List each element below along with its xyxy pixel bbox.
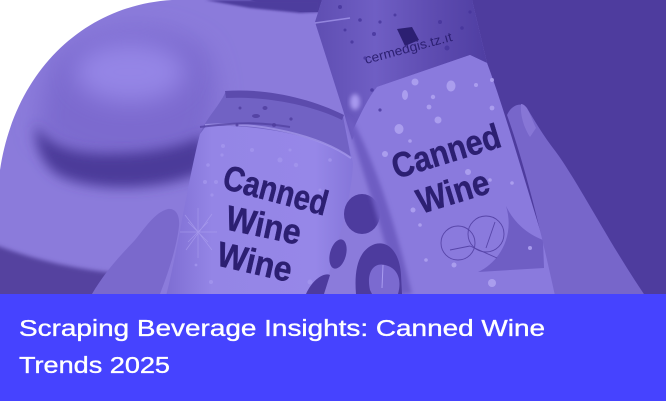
bottle of canned wine	[315, 0, 560, 294]
bottle label text	[392, 122, 502, 213]
dark blobs between can and bottle	[306, 194, 380, 294]
blurred hat in background	[0, 0, 388, 294]
bottle label text: Canned	[387, 117, 505, 187]
left hand finger	[92, 209, 179, 294]
can label text: Canned	[219, 158, 332, 223]
can of wine	[165, 90, 353, 300]
title	[19, 315, 545, 378]
right hand thumb and palm	[507, 104, 648, 300]
photo background	[250, 0, 666, 294]
title: Scraping Beverage Insights: Canned Wine	[19, 315, 545, 341]
can label text: Wine	[222, 199, 305, 253]
can label text: Wine	[213, 235, 296, 290]
white rounded corner of the image	[0, 0, 172, 170]
can label text	[220, 166, 330, 281]
photo: two hands toasting canned wine	[0, 0, 666, 300]
can water drops	[195, 106, 332, 284]
bottle citrus illustration	[441, 206, 544, 272]
bottle logo: cermedgis.tz.ıt	[363, 29, 454, 67]
can sparkle decoration	[180, 208, 217, 258]
title: Trends 2025	[19, 352, 170, 378]
title band	[0, 294, 666, 401]
bottle water drops	[382, 78, 532, 287]
bottle label text: Wine	[412, 163, 494, 222]
finger holding bottle	[356, 243, 402, 294]
